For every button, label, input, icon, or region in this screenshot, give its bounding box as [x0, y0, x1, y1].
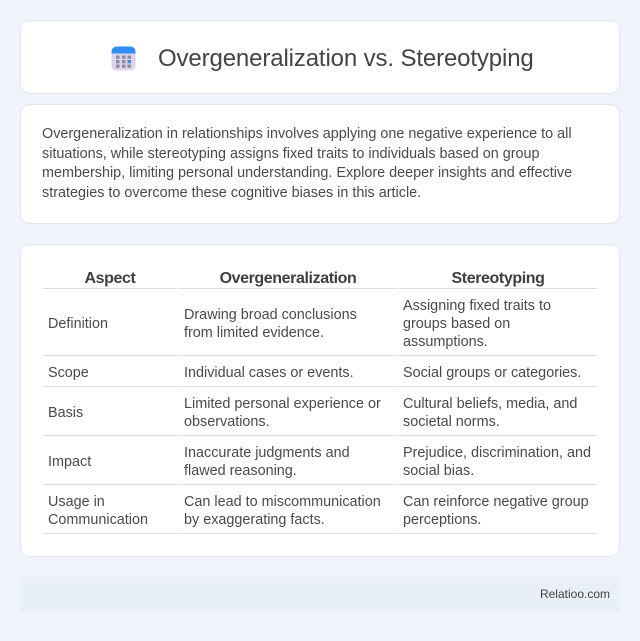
row: usage in communication: Can reinforce negative group [403, 494, 589, 510]
text block: introduction: Overgeneralization in relationships involves applying one negative experience to all [42, 126, 572, 142]
row: usage in communication [48, 494, 589, 528]
row: basis: Limited personal experience or [184, 396, 381, 412]
row: scope: Individual cases or events. [184, 365, 354, 381]
table header: Aspect [85, 270, 135, 287]
text block: introduction [42, 126, 572, 201]
row: scope: Scope [48, 365, 89, 381]
row: basis: observations. [184, 414, 270, 430]
row: impact: Prejudice, discrimination, and [403, 445, 591, 461]
row: scope [48, 365, 581, 381]
row: definition: Assigning fixed traits to [403, 298, 551, 314]
row: usage in communication: perceptions. [403, 512, 481, 528]
row: definition: assumptions. [403, 334, 488, 350]
row: definition: from limited evidence. [184, 325, 324, 341]
text block: introduction: situations, while stereotyping assigns fixed traits to individuals based on group [42, 146, 540, 162]
row: usage in communication: Usage in [48, 494, 105, 510]
row: impact: Impact [48, 454, 91, 470]
row: basis [48, 396, 577, 430]
row: usage in communication: Communication [48, 512, 148, 528]
row: definition: Definition [48, 316, 108, 332]
text block: introduction: membership, limiting personal understanding. Explore deeper insights and effective [42, 165, 572, 181]
panel: introduction [20, 104, 620, 224]
text block: introduction: strategies to overcome these cognitive biases in this article. [42, 185, 421, 201]
row: definition [48, 298, 551, 350]
row: impact: Inaccurate judgments and [184, 445, 350, 461]
row: impact: flawed reasoning. [184, 463, 297, 479]
footer bar [20, 577, 620, 611]
table header [84, 270, 544, 287]
row: scope: Social groups or categories. [403, 365, 581, 381]
footer text: Relatioo.com [540, 587, 610, 601]
row: impact [48, 445, 591, 479]
row: definition: groups based on [403, 316, 510, 332]
panel: title [20, 20, 620, 94]
row: definition: Drawing broad conclusions [184, 307, 357, 323]
panel: comparison table [20, 244, 620, 557]
row: basis: Basis [48, 405, 83, 421]
row: usage in communication: by exaggerating facts. [184, 512, 325, 528]
row: basis: Cultural beliefs, media, and [403, 396, 577, 412]
icon: calendar [112, 46, 136, 70]
row: basis: societal norms. [403, 414, 500, 430]
row: usage in communication: Can lead to miscommunication [184, 494, 381, 510]
table header: Overgeneralization [220, 270, 356, 287]
table header: Stereotyping [452, 270, 544, 287]
row: impact: social bias. [403, 463, 474, 479]
heading: Overgeneralization vs. Stereotyping [158, 45, 534, 72]
